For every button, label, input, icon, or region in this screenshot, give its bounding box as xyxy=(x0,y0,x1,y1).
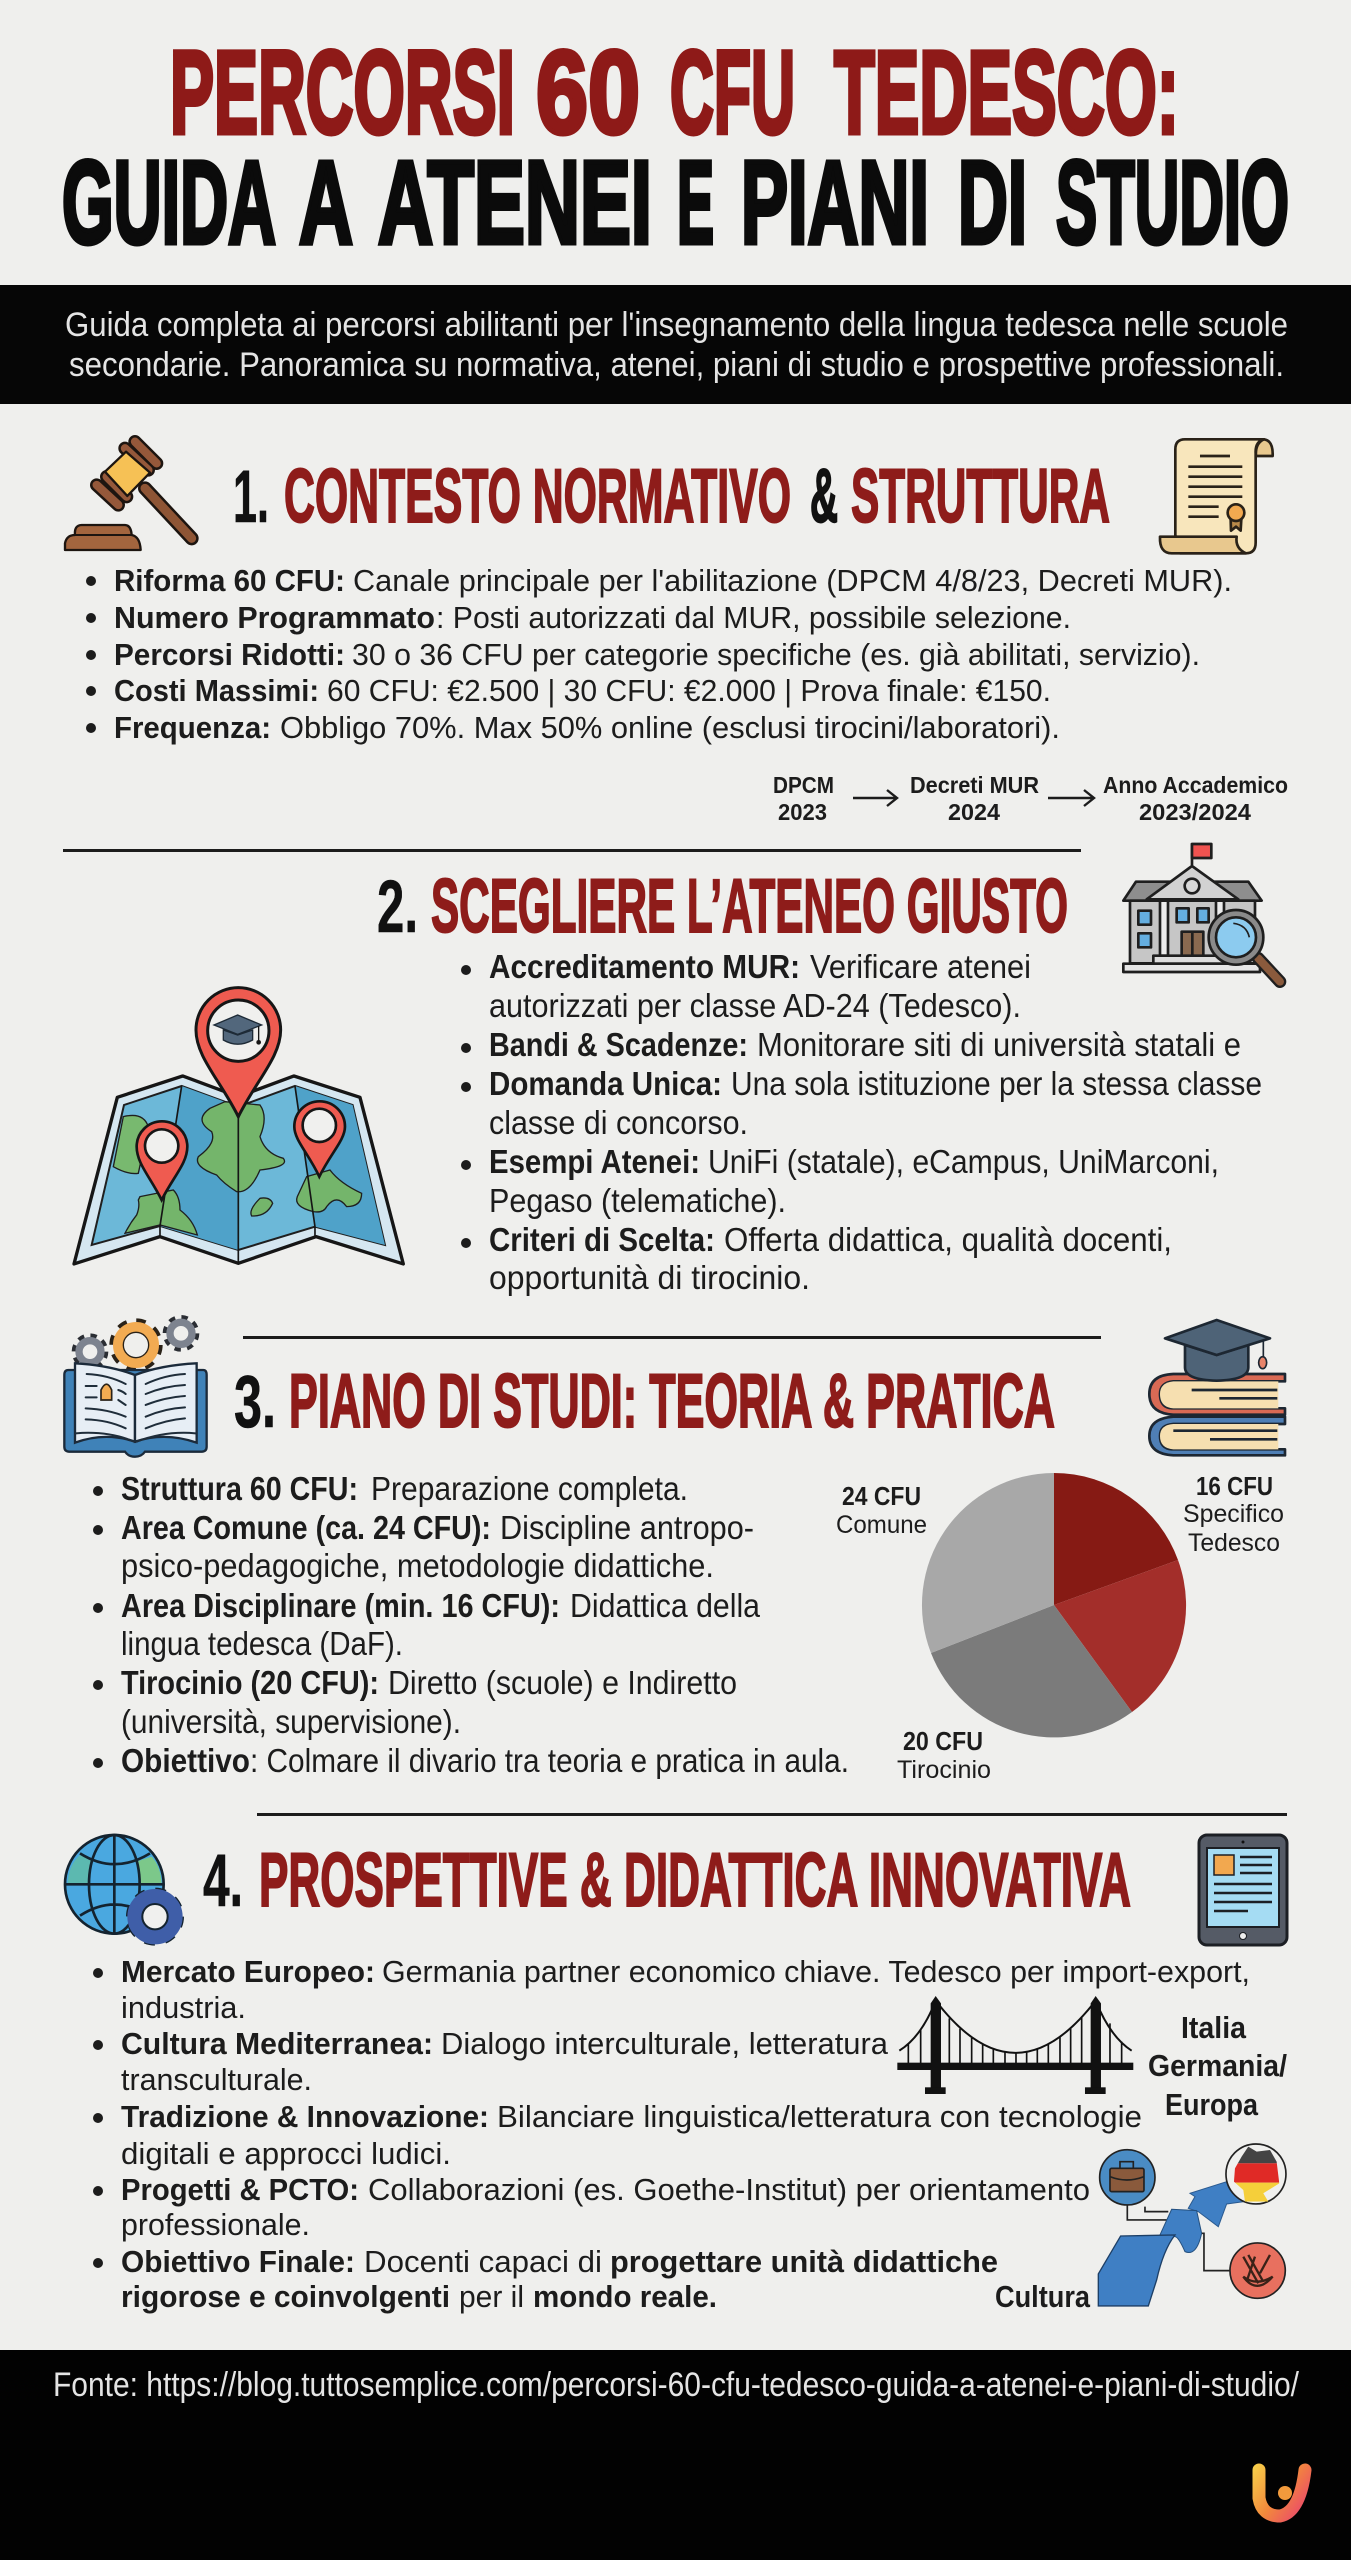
list: section 3: Area Comune (ca. 24 CFU): xyxy=(121,1509,491,1546)
list: section 2: Criteri di Scelta: xyxy=(489,1221,715,1258)
list: section 4: progettare unità didattiche xyxy=(610,2244,998,2279)
list: section 4: Docenti capaci di xyxy=(364,2244,602,2279)
list: section 4: Tradizione & Innovazione: xyxy=(121,2099,489,2134)
label: 16 CFU: 16 CFU xyxy=(1196,1471,1273,1501)
icon: university with magnifier xyxy=(1123,843,1280,982)
title xyxy=(62,27,1289,269)
title: E xyxy=(677,137,714,269)
logo xyxy=(1259,2470,1305,2516)
timeline: normative: Anno Accademico xyxy=(1103,772,1288,798)
panel: section 3 piano di studi xyxy=(64,1320,1285,1784)
title: DI xyxy=(958,137,1027,269)
icon: suspension bridge xyxy=(897,1996,1133,2094)
icon: tablet xyxy=(1199,1835,1287,1945)
list: section 1: Numero Programmato xyxy=(114,600,435,635)
label: Italia Germania/Europa xyxy=(1148,2010,1287,2122)
list: section 1 xyxy=(86,563,1232,745)
icon: open book with gears xyxy=(64,1320,207,1457)
list: section 4: Dialogo interculturale, letteratura xyxy=(441,2026,889,2061)
panel: section 4 prospettive xyxy=(65,1835,1287,2314)
list: section 3: Struttura 60 CFU: xyxy=(121,1470,358,1507)
list: section 3: Area Disciplinare (min. 16 CFU): xyxy=(121,1587,560,1624)
heading: section 2: 2. xyxy=(377,865,418,948)
list: section 4: professionale. xyxy=(121,2207,310,2242)
label: 24 CFU xyxy=(836,1481,927,1539)
list: section 2: Accreditamento MUR: xyxy=(489,948,800,985)
list: section 2: autorizzati per classe AD-24 (Tedesco). xyxy=(489,987,1021,1024)
label: 16 CFU: Specifico xyxy=(1183,1500,1284,1528)
pie chart: CFU distribution xyxy=(836,1471,1284,1784)
list: section 4: Collaborazioni (es. Goethe-Institut) per orientamento xyxy=(368,2172,1090,2207)
title: GUIDA xyxy=(62,137,276,269)
list: section 1: Costi Massimi: xyxy=(114,673,319,708)
timeline: normative xyxy=(773,772,1288,825)
heading: section 1: STRUTTURA xyxy=(851,454,1110,539)
heading: section 1: 1. xyxy=(233,455,269,538)
list: section 2: Verificare atenei xyxy=(810,948,1031,985)
label: 24 CFU: 24 CFU xyxy=(842,1481,921,1511)
label: 20 CFU: 20 CFU xyxy=(903,1726,983,1756)
list: section 1: Percorsi Ridotti: xyxy=(114,637,345,672)
heading: section 1: & xyxy=(810,454,838,539)
icon: scroll xyxy=(1160,439,1273,553)
heading: section 4: 4. xyxy=(203,1839,243,1922)
heading: section 3 xyxy=(234,1359,1055,1444)
timeline: normative: Decreti MUR xyxy=(910,772,1039,798)
timeline: normative: 2023/2024 xyxy=(1139,799,1251,825)
list: section 2: UniFi (statale), eCampus, UniMarconi, xyxy=(708,1143,1219,1180)
list: section 3: Discipline antropo- xyxy=(500,1509,754,1546)
list: section 1: Canale principale per l'abilitazione (DPCM 4/8/23, Decreti MUR). xyxy=(353,563,1232,598)
list: section 4: Germania partner economico chiave. Tedesco per import-export, xyxy=(382,1954,1250,1989)
list: section 4: rigorose e coinvolgenti xyxy=(121,2279,450,2314)
list: section 3: : Colmare il divario tra teoria e pratica in aula. xyxy=(250,1742,849,1779)
list: section 4: industria. xyxy=(121,1990,246,2025)
list: section 2: Domanda Unica: xyxy=(489,1065,722,1102)
icon: gavel xyxy=(65,442,192,550)
list: section 1: Frequenza: xyxy=(114,710,271,745)
heading: section 3: 3. xyxy=(234,1360,276,1443)
intro band xyxy=(0,285,1351,404)
list: section 3 xyxy=(93,1470,849,1779)
label: 16 CFU: Tedesco xyxy=(1188,1529,1280,1557)
label: 24 CFU: Comune xyxy=(836,1511,927,1539)
list: section 1: Obbligo 70%. Max 50% online (esclusi tirocini/laboratori). xyxy=(280,710,1060,745)
list: section 4: Obiettivo Finale: xyxy=(121,2244,355,2279)
list: section 2: Monitorare siti di università statali e xyxy=(757,1026,1241,1063)
list: section 3: Tirocinio (20 CFU): xyxy=(121,1664,379,1701)
list: section 3: lingua tedesca (DaF). xyxy=(121,1625,403,1662)
label: 16 CFU xyxy=(1183,1471,1284,1557)
timeline: normative: 2023 xyxy=(778,799,827,825)
label: 20 CFU: Tirocinio xyxy=(897,1756,991,1784)
list: section 3: Didattica della xyxy=(570,1587,761,1624)
label: Italia Germania/Europa: Europa xyxy=(1165,2087,1259,2122)
icon: cultural path ribbon xyxy=(1098,2144,1286,2306)
title: PERCORSI xyxy=(170,27,515,159)
list: section 2: Bandi & Scadenze: xyxy=(489,1026,748,1063)
list: section 4: Mercato Europeo: xyxy=(121,1954,375,1989)
heading: section 2 xyxy=(377,864,1068,949)
label: Italia Germania/Europa: Germania/ xyxy=(1148,2048,1287,2083)
list: section 2: classe di concorso. xyxy=(489,1104,748,1141)
label: Italia Germania/Europa: Italia xyxy=(1181,2010,1247,2045)
list: section 1: 30 o 36 CFU per categorie specifiche (es. già abilitati, servizio). xyxy=(352,637,1200,672)
list: section 1: : Posti autorizzati dal MUR, possibile selezione. xyxy=(436,600,1071,635)
title: PIANI xyxy=(741,137,929,269)
list: section 4: per il xyxy=(459,2279,524,2314)
list: section 3: psico-pedagogiche, metodologie didattiche. xyxy=(121,1547,714,1584)
list: section 3: Obiettivo xyxy=(121,1742,250,1779)
panel: section 2 scegliere l'ateneo xyxy=(74,843,1280,1296)
icon: books with graduation cap xyxy=(1149,1320,1285,1455)
list: section 2: Una sola istituzione per la stessa classe xyxy=(731,1065,1262,1102)
title: A xyxy=(299,137,353,269)
list: section 3: Diretto (scuole) e Indiretto xyxy=(388,1664,737,1701)
label: 20 CFU xyxy=(897,1726,991,1784)
list: section 4: Bilanciare linguistica/letteratura con tecnologie xyxy=(497,2099,1142,2134)
list: section 4: Progetti & PCTO: xyxy=(121,2172,359,2207)
icon: globe with gear xyxy=(65,1835,179,1941)
title: 60 xyxy=(536,27,640,159)
timeline: normative: DPCM xyxy=(773,772,834,798)
list: section 4: mondo reale. xyxy=(533,2279,717,2314)
title: ATENEI xyxy=(378,137,652,269)
list: section 4: Cultura Mediterranea: xyxy=(121,2026,433,2061)
list: section 2: Pegaso (telematiche). xyxy=(489,1182,786,1219)
list: section 3: Preparazione completa. xyxy=(371,1470,688,1507)
list: section 1: Riforma 60 CFU: xyxy=(114,563,345,598)
footer band xyxy=(0,2350,1351,2560)
list: section 1: 60 CFU: €2.500 | 30 CFU: €2.000 | Prova finale: €150. xyxy=(327,673,1051,708)
title: CFU xyxy=(670,27,795,159)
list: section 2 xyxy=(461,948,1262,1296)
list: section 4 xyxy=(93,1954,1250,2314)
heading: section 1: CONTESTO NORMATIVO xyxy=(284,454,791,539)
timeline: normative: 2024 xyxy=(948,799,1000,825)
list: section 4: transculturale. xyxy=(121,2062,312,2097)
list: section 2: Offerta didattica, qualità docenti, xyxy=(724,1221,1172,1258)
list: section 4: digitali e approcci ludici. xyxy=(121,2136,451,2171)
icon: map with pins xyxy=(74,988,403,1264)
label: Cultura: Cultura xyxy=(995,2279,1091,2314)
list: section 3: (università, supervisione). xyxy=(121,1703,461,1740)
panel: section 1 contesto normativo xyxy=(65,439,1288,825)
list: section 2: opportunità di tirocinio. xyxy=(489,1259,810,1296)
list: section 2: Esempi Atenei: xyxy=(489,1143,700,1180)
